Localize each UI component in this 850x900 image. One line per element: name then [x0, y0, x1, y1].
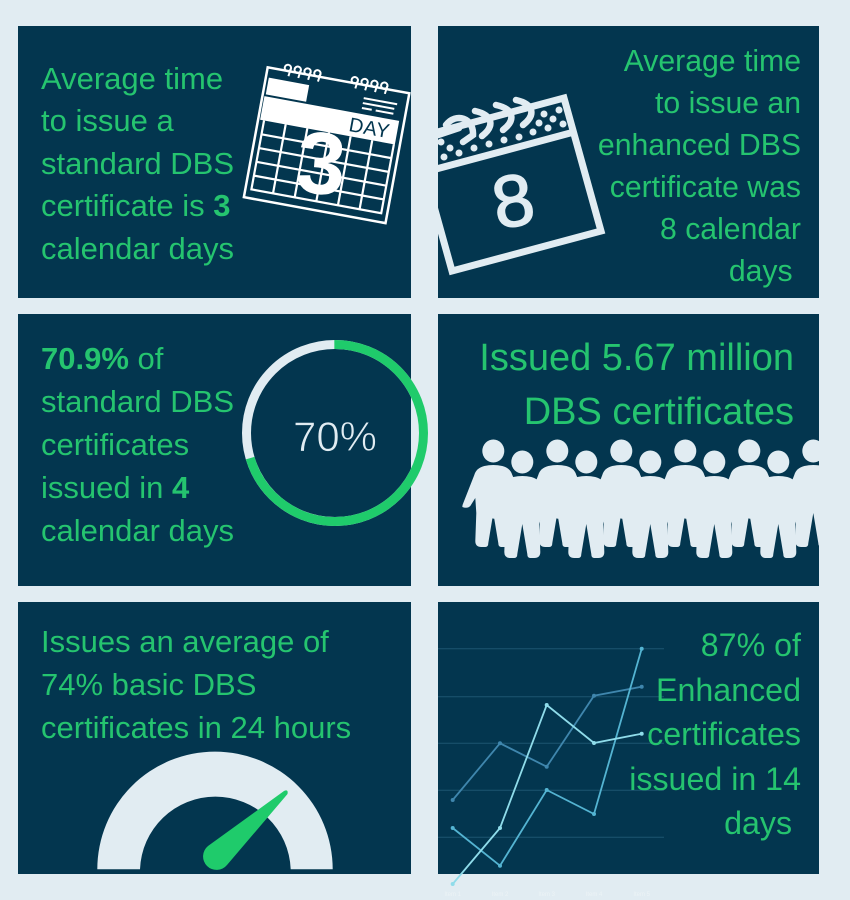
text: standard within 4 days: issued in 4 [41, 470, 189, 505]
line chart [438, 646, 664, 898]
icon: calendar day 3: 3 [293, 112, 349, 214]
text: basic in 24 hours: certificates in 24 hours [41, 710, 351, 745]
text: standard within 4 days: calendar days [41, 513, 234, 548]
panel: total issued [438, 314, 819, 586]
donut chart: 70 percent: 70% [293, 413, 377, 460]
text: enhanced within 14 days: certificates [647, 716, 801, 752]
text: basic in 24 hours: 74% basic DBS [41, 667, 256, 702]
text: average enhanced time: certificate was [610, 171, 801, 204]
heading: issued total: DBS certificates [524, 391, 794, 433]
icon: speedometer gauge [97, 752, 333, 870]
text: average enhanced time: 8 calendar [660, 213, 801, 246]
text: average standard time: calendar days [41, 231, 234, 266]
text: average standard time: certificate is 3 [41, 188, 231, 223]
text: standard within 4 days: 70.9% of [41, 341, 163, 376]
icon: crowd of people [462, 440, 819, 558]
panel: standard certificate time [18, 26, 411, 298]
series three [451, 704, 643, 886]
panel: enhanced in 14 days [438, 602, 819, 874]
text: average enhanced time: days [729, 255, 793, 288]
axis labels: Item 5 [633, 892, 651, 898]
axis labels: Item 2 [492, 892, 509, 898]
icon: calendar day 8 [438, 94, 606, 276]
text: average enhanced time: Average time [624, 45, 801, 78]
text: basic in 24 hours: Issues an average of [41, 624, 329, 659]
text: enhanced within 14 days: Enhanced [656, 672, 801, 708]
series one [451, 685, 643, 802]
text: standard within 4 days [41, 341, 234, 548]
text: average standard time [41, 61, 234, 266]
text: average standard time: standard DBS [41, 146, 234, 181]
text: basic in 24 hours [41, 624, 351, 745]
axis labels [444, 892, 651, 898]
heading: issued total [479, 337, 794, 433]
text: average standard time: to issue a [41, 103, 174, 138]
text: average standard time: Average time [41, 61, 223, 96]
series two [451, 647, 643, 867]
panel: basic certificates [18, 602, 411, 874]
icon: calendar day 3: DAY [347, 114, 392, 143]
heading: issued total: Issued 5.67 million [479, 337, 794, 379]
text: enhanced within 14 days: issued in 14 [629, 761, 801, 797]
panel: enhanced certificate time [438, 26, 819, 298]
text: average enhanced time: to issue an [655, 87, 801, 120]
text: average enhanced time: enhanced DBS [598, 129, 801, 162]
axis labels: Item 4 [586, 892, 603, 898]
panel: 70.9 percent standard [18, 314, 411, 586]
text: average enhanced time [598, 45, 801, 288]
donut chart: 70 percent [242, 340, 428, 526]
icon: calendar day 8: 8 [486, 158, 540, 245]
icon: calendar day 3 [242, 64, 411, 225]
text: enhanced within 14 days [629, 627, 801, 841]
text: enhanced within 14 days: 87% of [701, 627, 801, 663]
text: standard within 4 days: standard DBS [41, 384, 234, 419]
axis labels: Item 3 [538, 892, 556, 898]
text: standard within 4 days: certificates [41, 427, 189, 462]
text: enhanced within 14 days: days [724, 805, 792, 841]
axis labels: Item 1 [444, 892, 462, 898]
